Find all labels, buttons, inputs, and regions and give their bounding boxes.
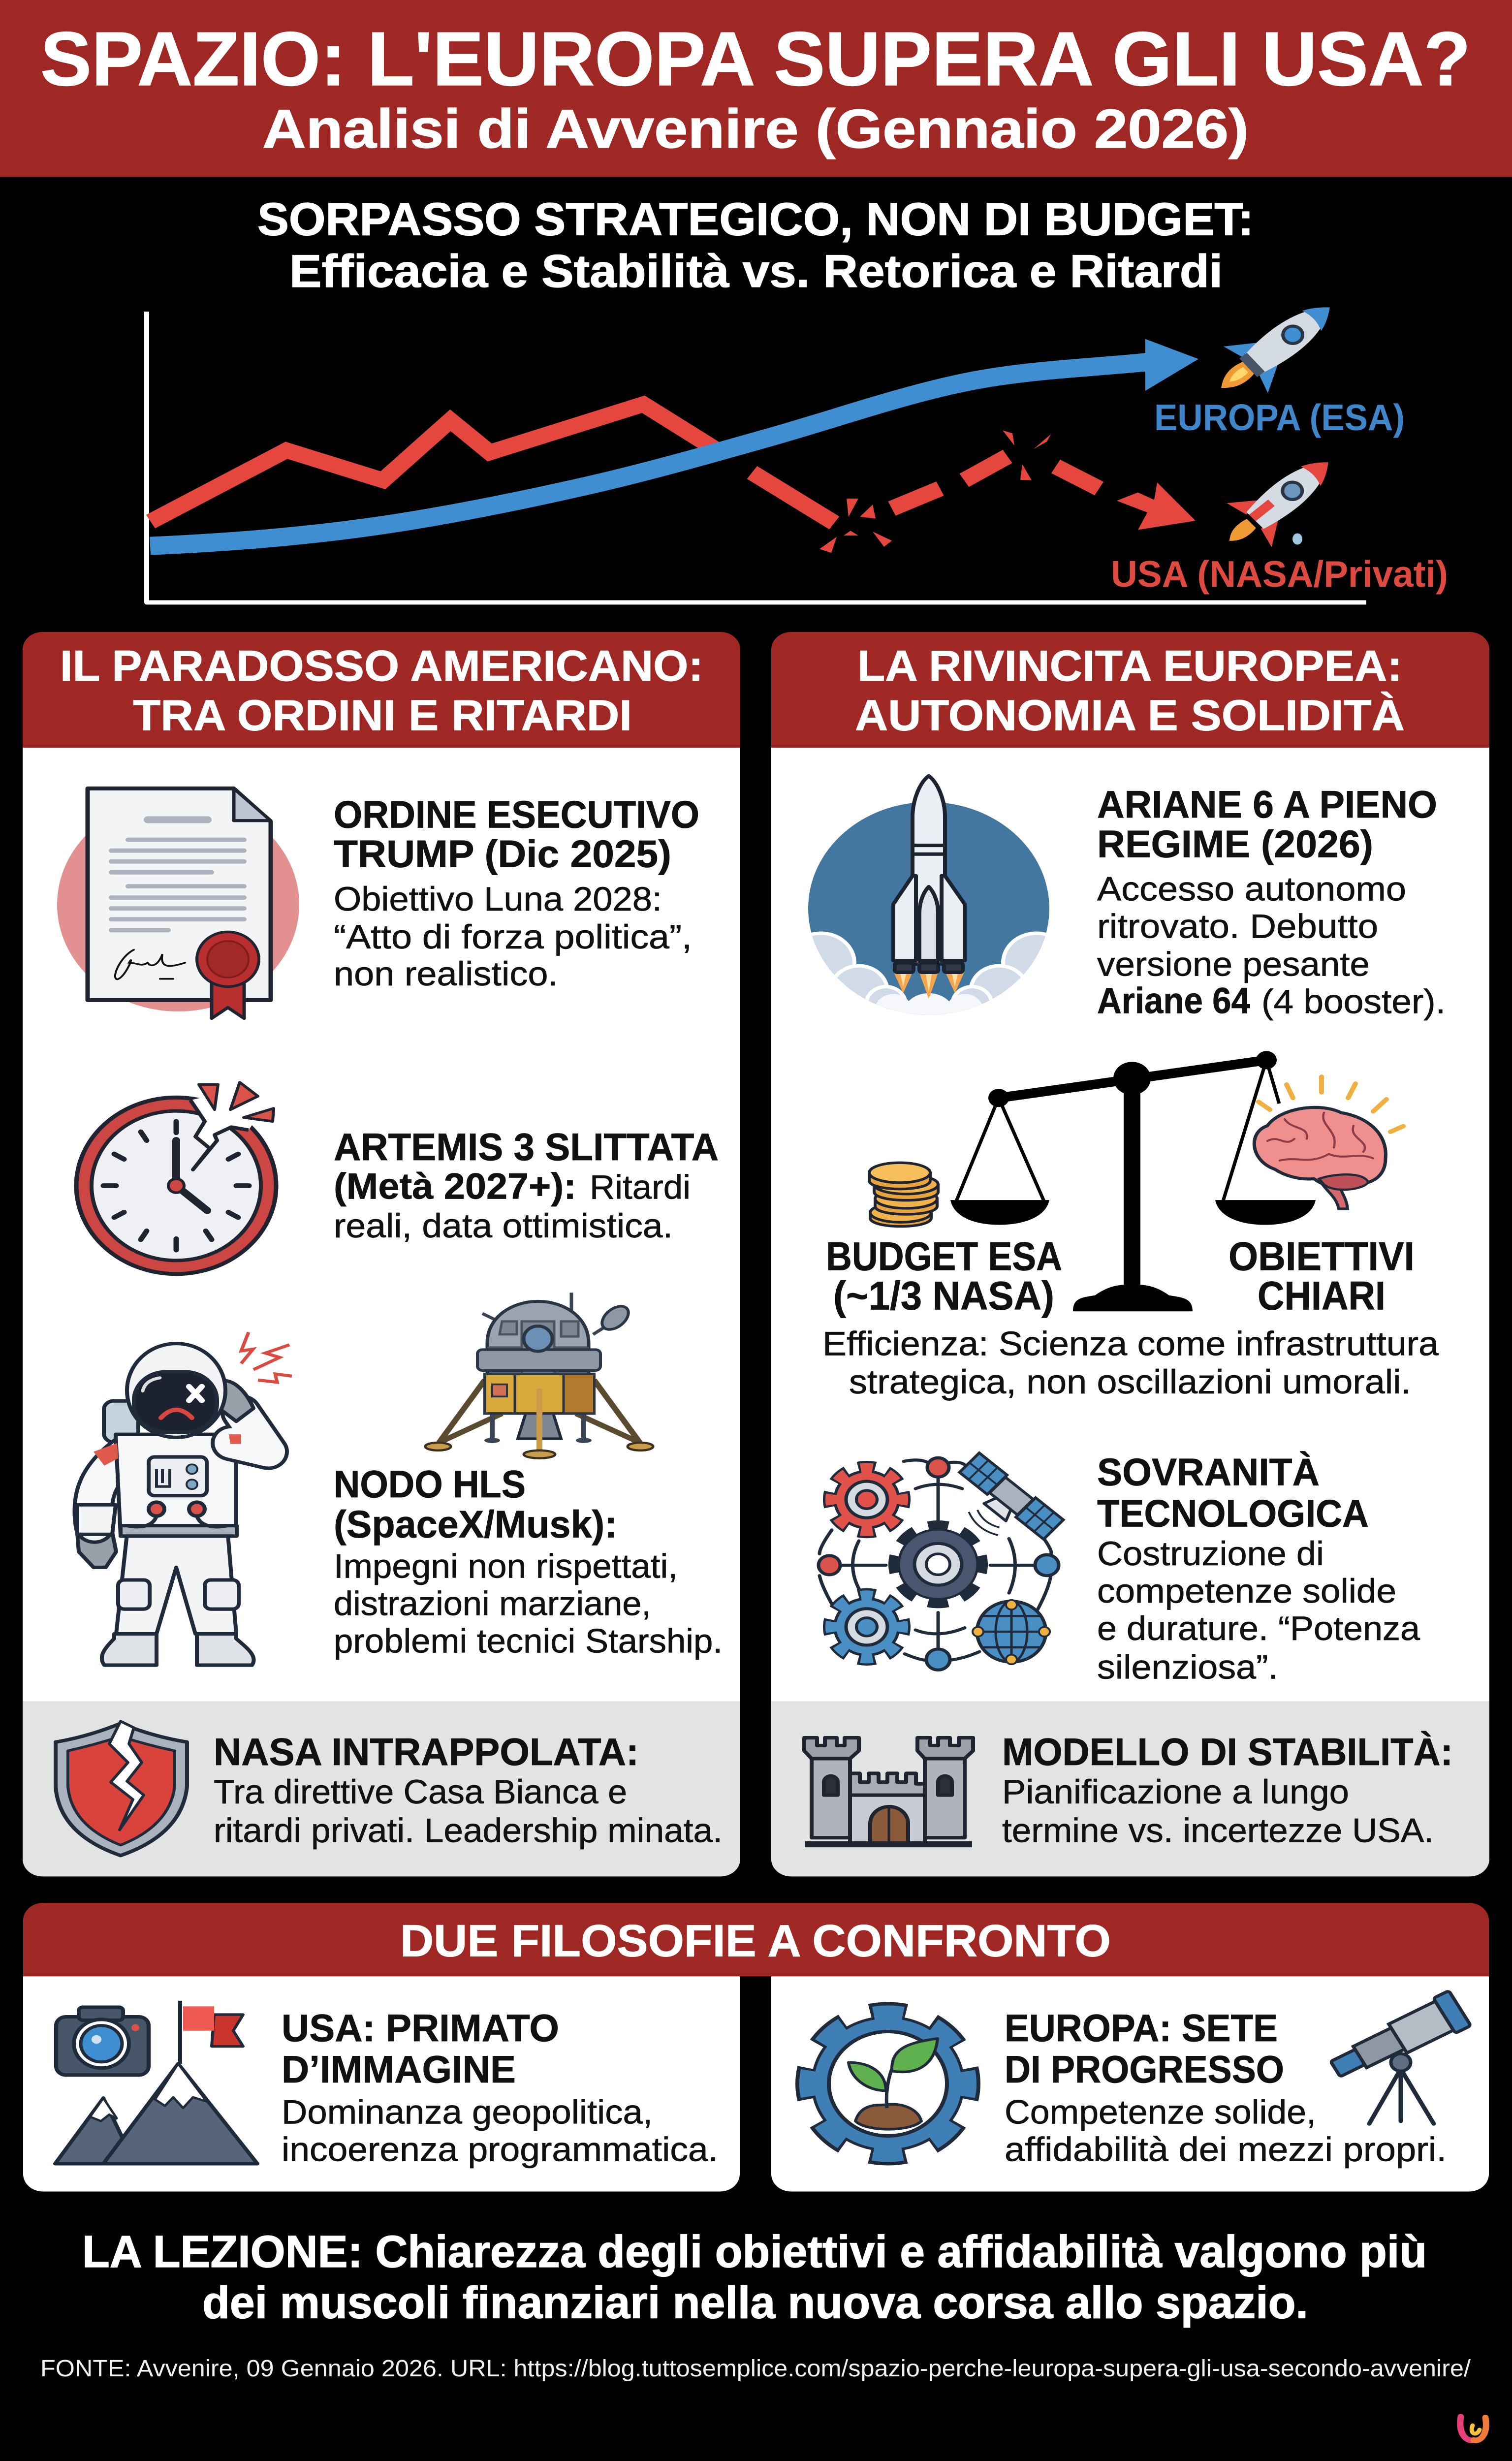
Europe blue arrow bbox=[150, 339, 1198, 546]
icon: broken clock bbox=[76, 1082, 276, 1274]
panel background bbox=[23, 748, 740, 1876]
text: Ariane 6: ritrovato. Debutto bbox=[1097, 907, 1378, 946]
text: artemis 3: ARTEMIS 3 SLITTATA bbox=[334, 1126, 719, 1168]
text: sovranità tecnologica: Costruzione di bbox=[1097, 1534, 1324, 1573]
text: sovranità tecnologica: e durature. “Potenza bbox=[1097, 1609, 1420, 1647]
text: ordine esecutivo: Obiettivo Luna 2028: bbox=[334, 880, 662, 918]
red gear bbox=[830, 1467, 903, 1532]
text: nodo HLS: (SpaceX/Musk): bbox=[334, 1503, 617, 1546]
chart heading: SORPASSO STRATEGICO, NON DI BUDGET: bbox=[257, 193, 1254, 245]
conclusion: la lezione bbox=[82, 2226, 1427, 2328]
text: ordine esecutivo: non realistico. bbox=[334, 954, 558, 993]
text: artemis 3: reali, data ottimistica. bbox=[334, 1206, 673, 1245]
icon: lunar lander bbox=[425, 1293, 653, 1458]
text: artemis 3: (Metà 2027+): bbox=[334, 1166, 576, 1206]
text: sovranità tecnologica bbox=[1097, 1451, 1420, 1686]
text: NASA intrappolata: ritardi privati. Leadership minata. bbox=[214, 1811, 723, 1849]
label: budget ESA: (~1/3 NASA) bbox=[833, 1274, 1054, 1319]
text: sovranità tecnologica: competenze solide bbox=[1097, 1572, 1396, 1610]
text: USA primato: USA: PRIMATO bbox=[282, 2007, 559, 2050]
icon: camera bbox=[56, 2007, 149, 2075]
icon: troubled astronaut bbox=[77, 1332, 292, 1665]
icon: gear network bbox=[819, 1453, 1064, 1670]
right card bbox=[771, 1973, 1489, 2191]
text: Europa progresso: EUROPA: SETE bbox=[1005, 2007, 1278, 2050]
left card bbox=[23, 1973, 740, 2191]
text: USA primato bbox=[282, 2007, 718, 2169]
USA red arrow head and break shards bbox=[819, 430, 1196, 553]
label: budget ESA bbox=[826, 1234, 1062, 1319]
icon: glowing brain bbox=[1254, 1076, 1403, 1209]
text: ordine esecutivo bbox=[334, 793, 699, 993]
text: Europa progresso: affidabilità dei mezzi propri. bbox=[1005, 2130, 1447, 2169]
text: sovranità tecnologica: SOVRANITÀ bbox=[1097, 1451, 1320, 1493]
text: Ariane 6 bbox=[1097, 783, 1446, 1021]
panel header bbox=[23, 632, 740, 748]
text: modello di stabilità: Pianificazione a lungo bbox=[1002, 1772, 1349, 1811]
text: NASA intrappolata: Tra direttive Casa Bianca e bbox=[214, 1772, 627, 1811]
icon: castle bbox=[804, 1738, 973, 1844]
text: modello di stabilità bbox=[1002, 1731, 1453, 1849]
text: modello di stabilità: MODELLO DI STABILITÀ: bbox=[1002, 1731, 1453, 1773]
panel background bbox=[771, 748, 1489, 1876]
chart heading: Efficacia e Stabilità vs. Retorica e Ritardi bbox=[289, 246, 1223, 297]
chart axes bbox=[147, 312, 1366, 602]
label: budget ESA: BUDGET ESA bbox=[826, 1234, 1062, 1279]
text: Europa progresso: Competenze solide, bbox=[1005, 2093, 1316, 2131]
text: Europa progresso: DI PROGRESSO bbox=[1005, 2048, 1284, 2091]
panel header: TRA ORDINI E RITARDI bbox=[133, 691, 632, 739]
text: Ariane 6: ARIANE 6 A PIENO bbox=[1097, 783, 1437, 826]
panel header: IL PARADOSSO AMERICANO: bbox=[60, 641, 703, 690]
panel footer band bbox=[23, 1701, 740, 1876]
icon: damaged red rocket bbox=[1207, 441, 1351, 563]
section header bbox=[23, 1903, 1489, 1976]
label: obiettivi chiari: OBIETTIVI bbox=[1228, 1234, 1415, 1279]
icon: blue rocket bbox=[1199, 284, 1352, 411]
text: USA primato: Dominanza geopolitica, bbox=[282, 2093, 653, 2131]
subtitle: Analisi di Avvenire (Gennaio 2026) bbox=[262, 98, 1249, 160]
USA red line bbox=[151, 404, 1099, 523]
icon: droplet bbox=[1292, 534, 1302, 544]
text: nodo HLS bbox=[334, 1463, 723, 1660]
globe bbox=[973, 1600, 1050, 1664]
text: nodo HLS: problemi tecnici Starship. bbox=[334, 1622, 723, 1660]
panel: due filosofie a confronto bbox=[23, 1903, 1489, 2191]
text: nodo HLS: Impegni non rispettati, bbox=[334, 1547, 678, 1585]
text: USA primato: D’IMMAGINE bbox=[282, 2048, 516, 2091]
text: Ariane 6: Accesso autonomo bbox=[1097, 870, 1406, 908]
icon: Ariane 6 rocket bbox=[808, 774, 1049, 1015]
text: Ariane 6: Ariane 64 bbox=[1097, 980, 1250, 1021]
chart heading bbox=[257, 193, 1254, 297]
text: Ariane 6: versione pesante bbox=[1097, 945, 1370, 983]
panel header bbox=[771, 632, 1489, 748]
panel header: LA RIVINCITA EUROPEA: bbox=[857, 641, 1402, 690]
section header: DUE FILOSOFIE A CONFRONTO bbox=[400, 1915, 1111, 1966]
icon: cracked shield bbox=[56, 1721, 187, 1856]
text: modello di stabilità: termine vs. incertezze USA. bbox=[1002, 1811, 1434, 1849]
text: Ariane 6: REGIME (2026) bbox=[1097, 822, 1373, 865]
text: efficienza: strategica, non oscillazioni umorali. bbox=[849, 1362, 1411, 1401]
icon: telescope bbox=[1324, 1990, 1471, 2124]
text: Ariane 6: (4 booster). bbox=[1261, 982, 1446, 1020]
panel: il paradosso americano bbox=[23, 632, 740, 1876]
text: artemis 3: Ritardi bbox=[590, 1168, 691, 1206]
icon: gear with sprout bbox=[807, 2012, 969, 2155]
text: ordine esecutivo: ORDINE ESECUTIVO bbox=[334, 793, 699, 836]
conclusion: la lezione: dei muscoli finanziari nella nuova corsa allo spazio. bbox=[202, 2277, 1308, 2328]
label: obiettivi chiari: CHIARI bbox=[1258, 1274, 1386, 1319]
satellite bbox=[938, 1453, 1064, 1560]
text: NASA intrappolata bbox=[214, 1731, 723, 1849]
icon: coin stack bbox=[869, 1163, 938, 1227]
icon: executive order document bbox=[57, 789, 299, 1018]
text: efficienza: Efficienza: Scienza come infrastruttura bbox=[822, 1325, 1439, 1362]
label: obiettivi chiari bbox=[1228, 1234, 1415, 1319]
icon: brand logo bbox=[1460, 2417, 1486, 2440]
text: Europa progresso bbox=[1005, 2007, 1447, 2169]
icon: balance scale bbox=[950, 1051, 1316, 1311]
panel header: AUTONOMIA E SOLIDITÀ bbox=[855, 691, 1405, 739]
dark gear bbox=[897, 1528, 979, 1601]
text: ordine esecutivo: TRUMP (Dic 2025) bbox=[334, 833, 671, 876]
panel: la rivincita europea bbox=[771, 632, 1489, 1876]
text: ordine esecutivo: “Atto di forza politica”, bbox=[334, 917, 692, 956]
text: nodo HLS: NODO HLS bbox=[334, 1463, 526, 1506]
text: sovranità tecnologica: silenziosa”. bbox=[1097, 1648, 1278, 1686]
Europe label: EUROPA (ESA) bbox=[1154, 397, 1405, 438]
text: USA primato: incoerenza programmatica. bbox=[282, 2130, 718, 2169]
text: nodo HLS: distrazioni marziane, bbox=[334, 1584, 651, 1623]
text: sovranità tecnologica: TECNOLOGICA bbox=[1097, 1492, 1369, 1535]
text: NASA intrappolata: NASA INTRAPPOLATA: bbox=[214, 1731, 639, 1773]
blue gear bbox=[830, 1595, 903, 1659]
text: efficienza bbox=[822, 1325, 1439, 1401]
text: artemis 3 bbox=[334, 1126, 719, 1245]
header banner bbox=[0, 0, 1512, 177]
panel footer band bbox=[771, 1701, 1489, 1876]
icon: mountains with flag bbox=[55, 2001, 257, 2164]
USA label: USA (NASA/Privati) bbox=[1111, 553, 1448, 595]
line chart: Europe vs USA bbox=[147, 284, 1448, 602]
